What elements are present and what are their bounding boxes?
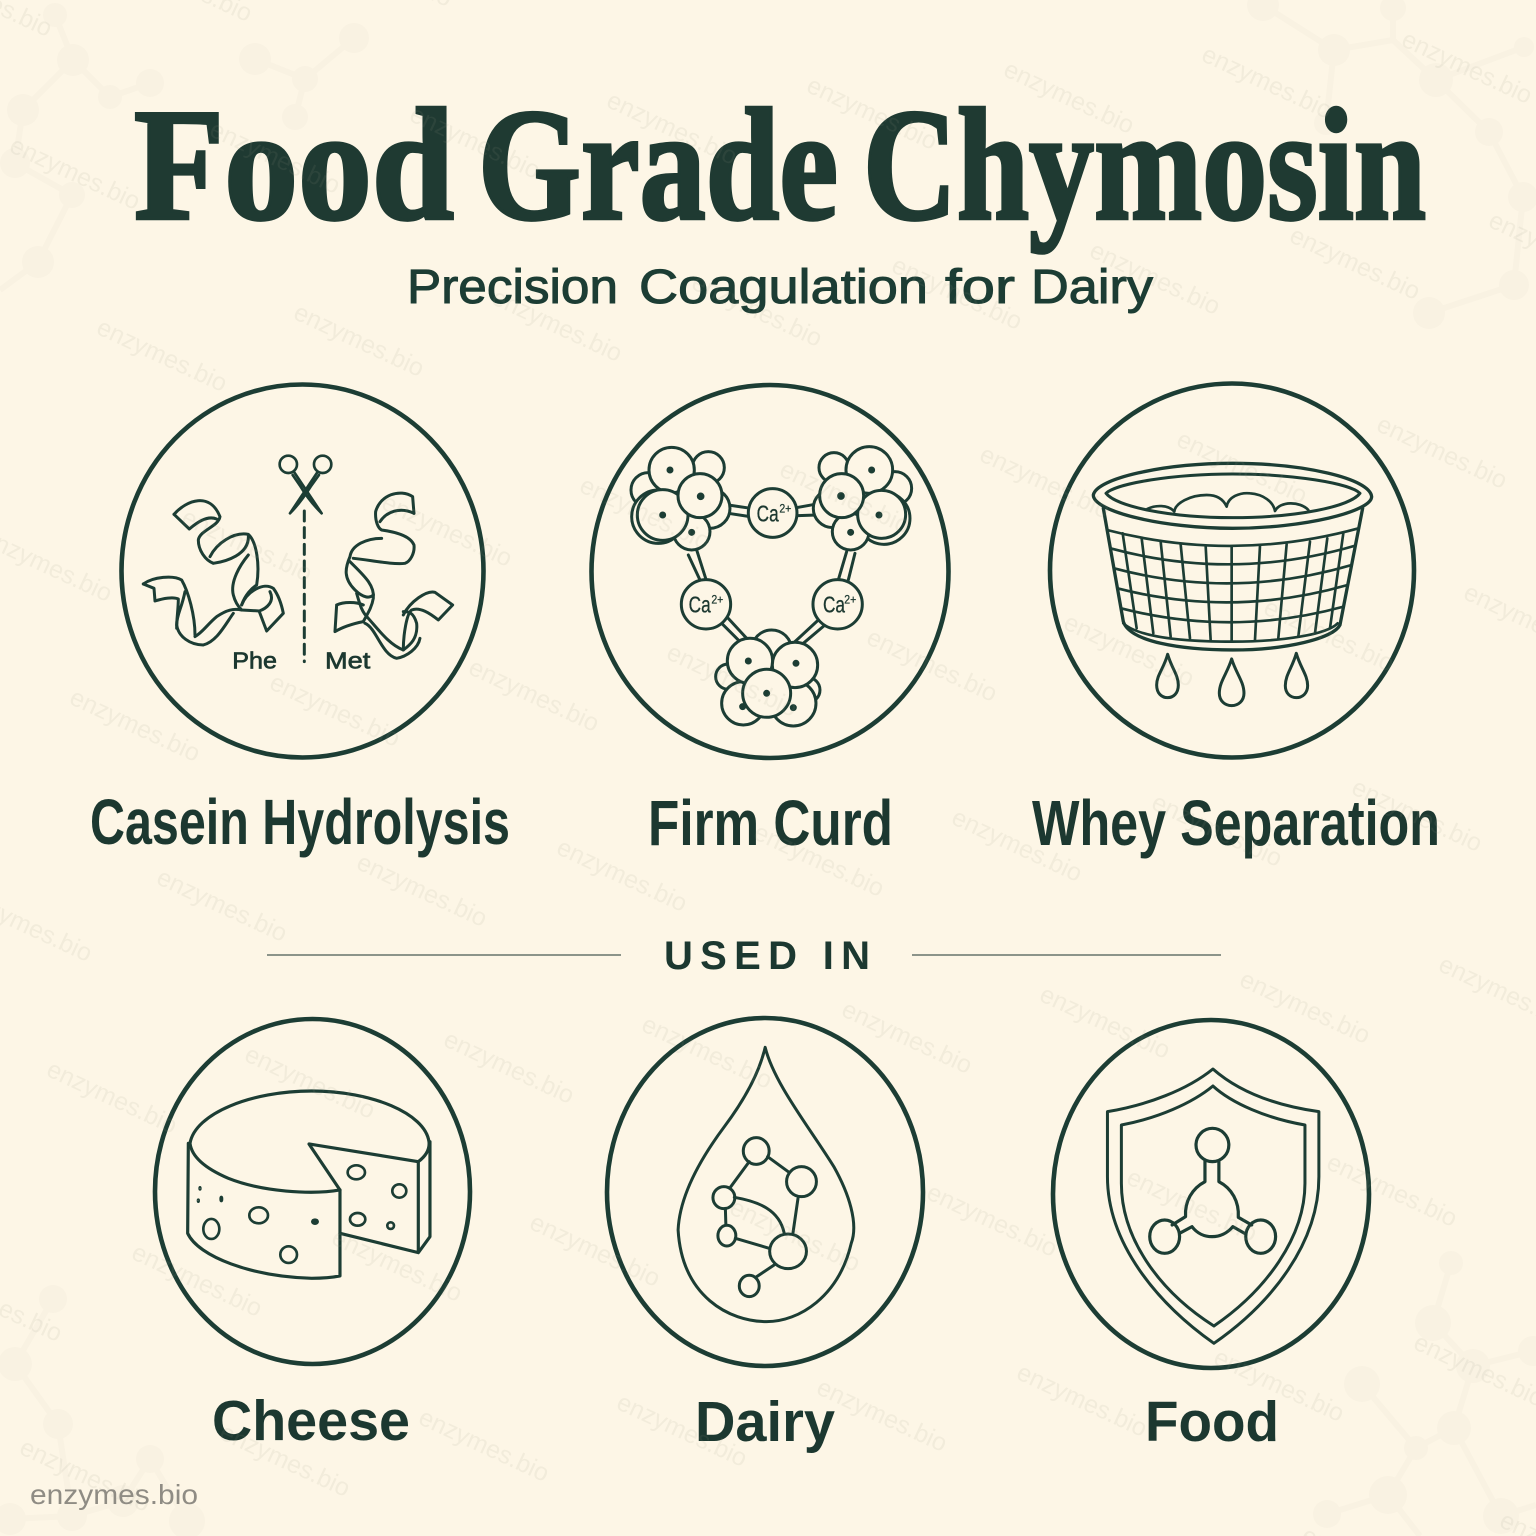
watermark pattern: enzymes.bio [837,995,977,1080]
panel: firm curd icon [592,385,948,758]
calcium bridges [688,503,855,643]
brand: enzymes.bio: enzymes.bio [30,1479,198,1510]
icon: shield with molecule [1107,1069,1319,1343]
watermark pattern: enzymes.bio [1372,410,1512,495]
watermark pattern: enzymes.bio [999,55,1139,140]
subtitle: Precision [407,261,618,314]
icon: curd strainer basket [1093,463,1372,650]
icon: calcium ion center [748,489,797,537]
icon: milk drop with molecule [678,1047,854,1322]
icon: micelle bottom [716,630,820,726]
panel: dairy icon [607,1018,923,1366]
watermark pattern: enzymes.bio [1147,788,1287,873]
watermark pattern: enzymes.bio [922,1178,1062,1263]
watermark pattern: enzymes.bio [265,668,405,753]
watermark pattern: enzymes.bio [215,1418,355,1503]
watermark pattern: enzymes.bio [1259,593,1399,678]
watermark pattern: enzymes.bio [862,623,1002,708]
watermark pattern: enzymes.bio [775,455,915,540]
icon: right protein ribbon [335,493,453,658]
watermark pattern: enzymes.bio [152,863,292,948]
icon: calcium ion left: Ca [689,591,711,617]
icon: left protein ribbon [143,501,283,645]
panel: food safety icon [1053,1020,1369,1368]
watermark pattern: enzymes.bio [1059,608,1199,693]
watermark pattern: enzymes.bio [637,1010,777,1095]
watermark pattern: enzymes.bio [612,1388,752,1473]
watermark pattern: enzymes.bio [127,1238,267,1323]
label: Phe: Phe [232,647,277,673]
watermark pattern: enzymes.bio [377,488,517,573]
watermark pattern: enzymes.bio [1235,965,1375,1050]
subtitle: Coagulation [639,261,928,314]
watermark pattern: enzymes.bio [439,1025,579,1110]
label: Dairy: Dairy [695,1390,835,1454]
watermark pattern: enzymes.bio [1085,236,1225,321]
watermark pattern: enzymes.bio [414,1403,554,1488]
watermark pattern: enzymes.bio [687,268,827,353]
watermark pattern: enzymes.bio [602,86,742,171]
icon: casein micelles bridged by calcium [631,447,912,726]
watermark pattern: enzymes.bio [352,848,492,933]
watermark pattern: enzymes.bio [1397,25,1536,110]
watermark pattern: enzymes.bio [1012,1358,1152,1443]
icon: scissors [280,456,331,513]
watermark pattern: enzymes.bio [405,100,545,185]
icon: whey drops [1157,653,1308,706]
panel: casein hydrolysis icon [122,384,484,758]
watermark pattern: enzymes.bio [1322,1148,1462,1233]
watermark pattern: enzymes.bio [887,251,1027,336]
cheese holes [198,1165,406,1263]
watermark pattern: enzymes.bio [1347,773,1487,858]
panel: cheese icon [155,1019,470,1364]
watermark pattern: enzymes.bio [662,638,802,723]
icon: calcium ion center: Ca [757,501,779,527]
watermark pattern: enzymes.bio [1035,980,1175,1065]
label: Cheese: Cheese [212,1389,410,1453]
dashed cleavage line [300,511,309,662]
icon: micelle top right [813,447,912,550]
label: Met: Met [325,647,371,673]
watermark pattern: enzymes.bio [327,1223,467,1308]
watermark pattern: enzymes.bio [749,818,889,903]
title: Grade [478,76,838,254]
label: Casein Hydrolysis: Casein Hydrolysis [90,786,510,858]
subtitle: Dairy [1031,261,1153,314]
watermark pattern: enzymes.bio [725,1193,865,1278]
watermark pattern: enzymes.bio [464,653,604,738]
watermark pattern: enzymes.bio [1172,425,1312,510]
watermark pattern: enzymes.bio [177,503,317,588]
subtitle [407,261,1153,314]
watermark pattern: enzymes.bio [947,803,1087,888]
watermark pattern: enzymes.bio [487,283,627,368]
title [134,76,1426,254]
watermark pattern: enzymes.bio [1285,221,1425,306]
watermark pattern: enzymes.bio [525,1208,665,1293]
icon: protein ribbons, scissors and cleavage line [143,456,453,673]
watermark pattern: enzymes.bio [575,471,715,556]
label: Food: Food [1145,1390,1279,1454]
watermark pattern: enzymes.bio [975,440,1115,525]
watermark pattern: enzymes.bio [15,1433,155,1518]
icon: calcium ion right [813,580,862,629]
label: Whey Separation: Whey Separation [1032,787,1440,859]
icon: micelle top left [631,447,730,550]
watermark pattern: enzymes.bio [240,1040,380,1125]
icon: calcium ion left: 2+ [711,593,723,607]
watermark pattern: enzymes.bio [1209,1343,1349,1428]
watermark pattern: enzymes.bio [65,683,205,768]
section divider: USED IN: USED IN [664,934,870,978]
watermark pattern: enzymes.bio [812,1373,952,1458]
watermark pattern: enzymes.bio [42,1055,182,1140]
icon: cheese wheel with cut wedge [188,1091,430,1278]
subtitle: for [945,261,1015,314]
panel: whey separation icon [1050,384,1414,758]
title: Chymosin [863,76,1426,254]
watermark pattern: enzymes.bio [92,313,232,398]
watermark pattern: enzymes.bio [205,115,345,200]
icon: calcium ion right: Ca [823,591,845,617]
watermark pattern: enzymes.bio [1122,1163,1262,1248]
icon: calcium ion center: 2+ [779,501,791,515]
watermark pattern: enzymes.bio [552,833,692,918]
label: Firm Curd: Firm Curd [648,787,893,859]
watermark pattern: enzymes.bio [802,71,942,156]
title: Food [134,76,454,254]
icon: calcium ion left [681,580,731,629]
watermark pattern: enzymes.bio [289,298,429,383]
icon: calcium ion right: 2+ [844,593,856,607]
watermark pattern: enzymes.bio [5,131,145,216]
watermark pattern: enzymes.bio [1197,40,1337,125]
